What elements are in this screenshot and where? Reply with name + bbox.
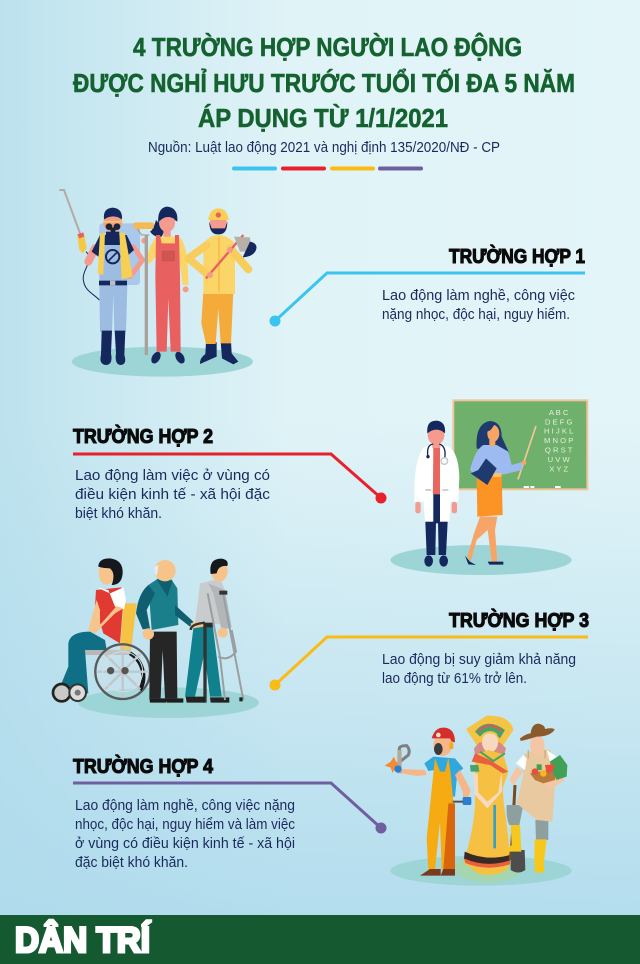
text: case 4 bbox=[75, 797, 295, 871]
heading: case 1: TRƯỜNG HỢP 1 bbox=[449, 244, 585, 268]
title: ĐƯỢC NGHỈ HƯU TRƯỚC TUỔI TỐI ĐA 5 NĂM bbox=[73, 68, 575, 98]
heading: case 3: TRƯỜNG HỢP 3 bbox=[449, 608, 589, 632]
text: case 2: Lao động làm việc ở vùng có bbox=[75, 467, 270, 484]
text: case 2: điều kiện kinh tế - xã hội đặc bbox=[75, 486, 271, 503]
illustration: doctor and teacher: M N O P bbox=[544, 436, 573, 445]
text: case 1 bbox=[382, 287, 575, 323]
title bbox=[73, 32, 575, 133]
source line: Nguồn: Luật lao động 2021 và nghị định 135/2020/NĐ - CP bbox=[148, 139, 500, 156]
text: case 4: đặc biệt khó khăn. bbox=[75, 854, 188, 871]
text: case 4: Lao động làm nghề, công việc nặng bbox=[75, 797, 295, 814]
text: case 1: Lao động làm nghề, công việc bbox=[382, 287, 575, 304]
connector: case 4 bbox=[73, 783, 386, 834]
text: case 4: nhọc, độc hại, nguy hiểm và làm việc bbox=[75, 816, 295, 833]
illustration: doctor and teacher: H I J K L bbox=[544, 427, 573, 436]
text: case 2: biệt khó khăn. bbox=[75, 505, 162, 522]
title: ÁP DỤNG TỪ 1/1/2021 bbox=[198, 103, 448, 133]
panel: case 3 bbox=[270, 608, 589, 690]
connector: case 2 bbox=[73, 454, 386, 504]
text: case 3: Lao động bị suy giảm khả năng bbox=[382, 651, 576, 668]
illustration: doctor and teacher: D E F G bbox=[545, 417, 573, 426]
panel: case 1 bbox=[270, 244, 585, 326]
heading: case 2: TRƯỜNG HỢP 2 bbox=[73, 424, 213, 448]
text: case 3: lao động từ 61% trở lên. bbox=[382, 670, 527, 687]
illustration: doctor and teacher: U V W bbox=[548, 455, 570, 464]
illustration: miner, ethnic woman, farmer bbox=[385, 716, 572, 886]
illustration: doctor and teacher: A B C bbox=[549, 408, 569, 417]
illustration: doctor and teacher bbox=[390, 400, 587, 575]
connector: case 3 bbox=[270, 637, 588, 690]
illustration: three workers bbox=[59, 190, 257, 377]
colour bars bbox=[232, 166, 423, 170]
heading: case 4: TRƯỜNG HỢP 4 bbox=[73, 754, 214, 778]
logo: Dân Trí: DÂN TRÍ bbox=[15, 920, 151, 960]
footer band bbox=[0, 915, 640, 964]
illustration: doctor and teacher: X Y Z bbox=[549, 464, 568, 473]
panel: case 2 bbox=[73, 424, 386, 522]
connector: case 1 bbox=[270, 273, 585, 326]
text: case 2 bbox=[75, 467, 271, 522]
text: case 4: ở vùng có điều kiện kinh tế - xã hội bbox=[75, 835, 295, 852]
text: case 1: nặng nhọc, độc hại, nguy hiểm. bbox=[382, 306, 570, 323]
panel: case 4 bbox=[73, 754, 386, 871]
illustration: wheelchair, elderly man, man on crutches bbox=[53, 558, 259, 718]
title: 4 TRƯỜNG HỢP NGƯỜI LAO ĐỘNG bbox=[133, 32, 522, 62]
illustration: doctor and teacher: Q R S T bbox=[545, 446, 573, 455]
text: case 3 bbox=[382, 651, 576, 687]
